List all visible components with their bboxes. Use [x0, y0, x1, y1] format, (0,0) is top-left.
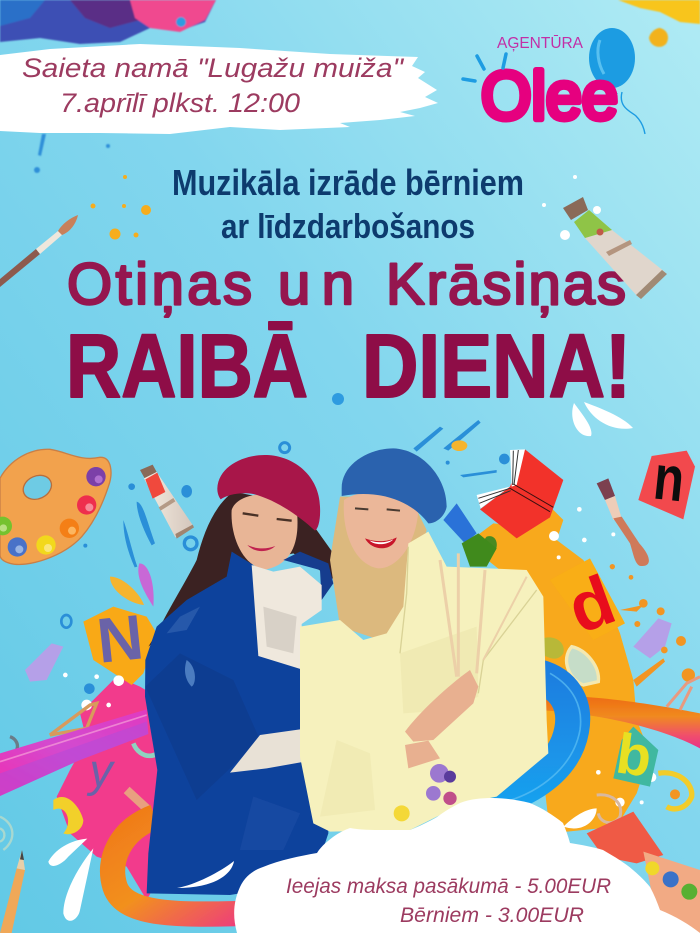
- title line two: DIENA!: [362, 317, 631, 417]
- venue and date text: Saieta namā "Lugažu muiža": [22, 53, 405, 83]
- white brush stroke banner: [0, 44, 438, 134]
- coat shadows: [400, 627, 478, 713]
- face: [232, 494, 298, 569]
- paint box: [643, 852, 700, 933]
- letter tile d: d: [558, 560, 625, 648]
- white drops: [48, 839, 93, 921]
- orange paint blob: [467, 507, 650, 833]
- small letters and marks: y: [86, 745, 115, 797]
- subtitle: Muzikāla izrāde bērniem: [172, 162, 524, 203]
- letter tile n: n: [651, 443, 688, 515]
- red card: [587, 812, 663, 863]
- lilac shape: [633, 618, 672, 658]
- blue paint splashes: [413, 420, 510, 477]
- price text: Ieejas maksa pasākumā - 5.00EUR: [286, 875, 611, 898]
- title line one: Otiņas: [67, 252, 252, 317]
- lips: [247, 545, 275, 551]
- decorative orange dots: [90, 175, 601, 405]
- sketch letter: [597, 795, 621, 823]
- sparks: [463, 54, 506, 81]
- lace collar: [252, 565, 322, 669]
- venue and date text: [22, 53, 405, 118]
- price text: [286, 875, 611, 927]
- blonde hair: [330, 497, 427, 647]
- magenta colour band: [0, 709, 148, 796]
- lower right illustration: [413, 420, 700, 933]
- blue beret: [342, 448, 447, 523]
- balloon: [589, 28, 645, 134]
- paint splash top right: [618, 0, 700, 47]
- orange and pink colour band: [537, 695, 700, 748]
- lower left illustration: [0, 443, 290, 933]
- blue ribbon: [490, 677, 573, 800]
- title line two: [66, 317, 631, 417]
- icon: pencil: [0, 850, 25, 933]
- icon: red paint tube: [140, 465, 194, 539]
- title line one: [67, 252, 626, 317]
- subtitle: [172, 162, 524, 246]
- icon: small paint brush top left: [0, 215, 78, 287]
- cream coat: [300, 532, 548, 832]
- title line one: Krāsiņas: [386, 252, 626, 317]
- half circle tile: [567, 647, 598, 685]
- figure: woman in red beret and blue coat: [145, 455, 340, 895]
- logo: Olee agency: [463, 28, 645, 134]
- white dots: [549, 507, 656, 807]
- sleeve shading: [145, 653, 260, 800]
- figure: woman in blue beret and cream coat: [300, 448, 597, 832]
- price text: Bērniem - 3.00EUR: [400, 904, 584, 927]
- icon: flat paint brush: [597, 478, 649, 566]
- face: [344, 492, 418, 568]
- logo word: Olee: [481, 58, 618, 134]
- eyes: [355, 508, 400, 511]
- hands and arms: [405, 670, 478, 742]
- hair: [148, 492, 340, 647]
- blue and green paint behind figure: [443, 503, 477, 543]
- smile: [365, 537, 397, 548]
- small letters and marks: [0, 703, 163, 850]
- paint brushes: [440, 553, 527, 677]
- title line two: RAIBĀ: [66, 317, 308, 417]
- icon: paint tube top right: [563, 197, 667, 299]
- blue coat: [145, 552, 328, 895]
- red beret: [217, 455, 320, 531]
- subtitle: ar līdzdarbošanos: [221, 208, 475, 246]
- white drop on blue coat: [177, 861, 234, 888]
- fabric flowers: [394, 764, 457, 821]
- orange dots: [610, 564, 695, 799]
- blue paint drips: [61, 443, 290, 694]
- icon: palette: [0, 449, 111, 564]
- paint splash top left: [0, 0, 216, 173]
- radio mast shape: [667, 677, 700, 710]
- logo label: AĢENTŪRA: [497, 35, 584, 52]
- letter tile N: [83, 602, 157, 685]
- price cloud: [234, 798, 700, 933]
- letter tile N: N: [94, 602, 147, 677]
- white drop on coat: [563, 808, 597, 828]
- letter tile b: b: [612, 723, 656, 790]
- eyes: [243, 513, 292, 521]
- venue and date text: 7.aprīlī plkst. 12:00: [60, 88, 300, 118]
- coloured drops: [110, 577, 144, 605]
- pink paint blob: [57, 677, 173, 900]
- orange ring: [113, 817, 253, 914]
- lilac shape: [25, 643, 63, 682]
- icon: open red book: [477, 449, 563, 538]
- yellow squiggle: [658, 773, 692, 809]
- white splash near title: [572, 402, 633, 436]
- lace cuff: [230, 729, 315, 773]
- title line one: un: [278, 252, 354, 317]
- white dots: [63, 673, 124, 710]
